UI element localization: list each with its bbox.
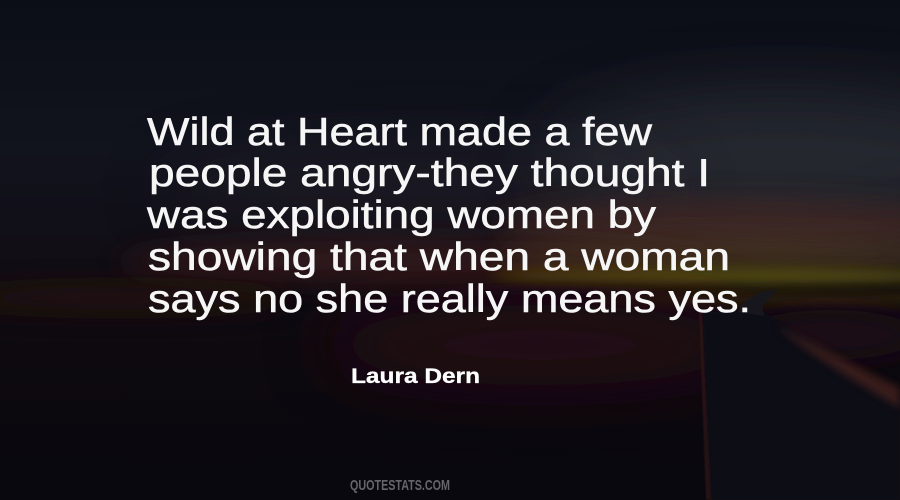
wing glow edge (775, 325, 900, 408)
quote line 3: was exploiting women by (146, 194, 657, 237)
quote text (146, 111, 751, 321)
quote line 2: people angry-they thought I (149, 152, 710, 195)
watermark: QUOTESTATS.COM (350, 477, 450, 494)
quote line 5: says no she really means yes. (148, 278, 751, 321)
winglet (738, 289, 778, 316)
wing body (703, 311, 900, 500)
wing fuselage line (699, 312, 711, 500)
airplane wing (699, 289, 900, 500)
author name: Laura Dern (351, 365, 480, 388)
quote line 1: Wild at Heart made a few (147, 111, 653, 154)
quote line 4: showing that when a woman (148, 236, 730, 279)
